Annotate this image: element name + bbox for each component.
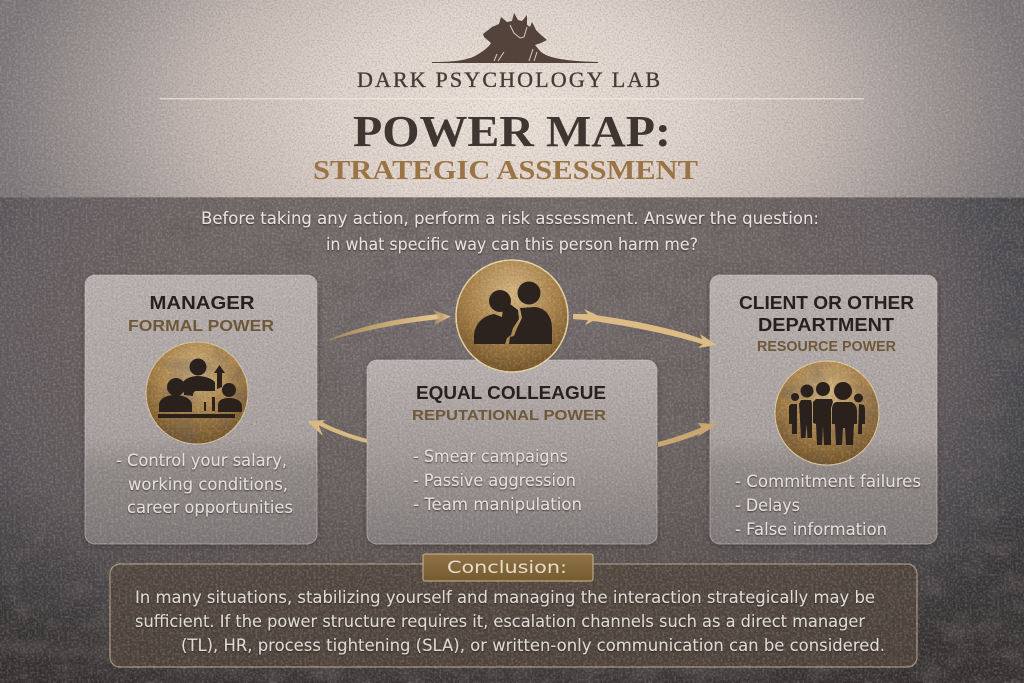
logo: three-headed dog — [432, 13, 598, 63]
heading: manager: MANAGER — [150, 293, 254, 313]
arrow: colleague icon to client — [573, 309, 717, 348]
list: colleague: - Team manipulation — [413, 495, 582, 515]
arrow: colleague to client — [658, 423, 718, 447]
conclusion text — [135, 588, 885, 655]
brand name: DARK PSYCHOLOGY LAB — [357, 67, 660, 92]
list: client: - False information — [735, 520, 887, 540]
intro text — [201, 209, 819, 255]
list: manager: - Control your salary, — [116, 451, 287, 471]
icon: manager and team — [158, 358, 242, 418]
panel: header band — [0, 0, 1024, 198]
medallion: manager — [146, 342, 248, 444]
list: manager: career opportunities — [127, 498, 293, 518]
conclusion tag — [423, 554, 593, 581]
list: client: - Delays — [735, 496, 800, 516]
heading: client: CLIENT OR OTHER — [739, 293, 914, 313]
list: colleague: - Passive aggression — [413, 471, 576, 491]
icon: group of people — [789, 382, 865, 445]
icon: colleagues whispering — [474, 282, 552, 344]
panel: client card — [710, 275, 937, 544]
heading: client: DEPARTMENT — [758, 315, 894, 335]
medallion: client — [775, 361, 879, 465]
manager content — [116, 293, 293, 518]
list: colleague — [413, 447, 582, 515]
subheading: formal power: FORMAL POWER — [128, 318, 274, 335]
intro text: Before taking any action, perform a risk assessment. Answer the question: — [201, 209, 819, 229]
conclusion tag: Conclusion: — [447, 558, 567, 578]
heading: client — [739, 293, 914, 335]
intro text: in what specific way can this person harm me? — [326, 235, 698, 255]
list: manager — [116, 451, 293, 518]
equal colleague content — [412, 383, 606, 515]
list: client — [735, 472, 921, 540]
list: manager: working conditions, — [128, 475, 288, 495]
subheading: reputational power: REPUTATIONAL POWER — [412, 407, 606, 424]
arrow: colleague to manager — [307, 420, 367, 443]
title: POWER MAP: — [353, 107, 671, 156]
heading: equal colleague: EQUAL COLLEAGUE — [416, 383, 606, 403]
list: colleague: - Smear campaigns — [413, 447, 568, 467]
client content — [735, 293, 921, 540]
conclusion text: In many situations, stabilizing yourself and managing the interaction strategically may be — [135, 588, 875, 607]
subheading: resource power: RESOURCE POWER — [757, 339, 897, 355]
arrow: manager to colleague icon — [326, 310, 451, 341]
medallion: colleague — [456, 260, 568, 372]
background: lower stone — [0, 198, 1024, 683]
header divider — [160, 98, 864, 100]
conclusion text: sufficient. If the power structure requires it, escalation channels such as a direct manager — [135, 612, 865, 631]
subtitle: STRATEGIC ASSESSMENT — [313, 154, 698, 185]
list: client: - Commitment failures — [735, 472, 921, 492]
conclusion text: (TL), HR, process tightening (SLA), or written-only communication can be considered. — [181, 636, 885, 655]
panel: conclusion box — [110, 564, 917, 667]
panel: manager card — [85, 275, 317, 544]
panel: equal colleague card — [367, 360, 657, 544]
